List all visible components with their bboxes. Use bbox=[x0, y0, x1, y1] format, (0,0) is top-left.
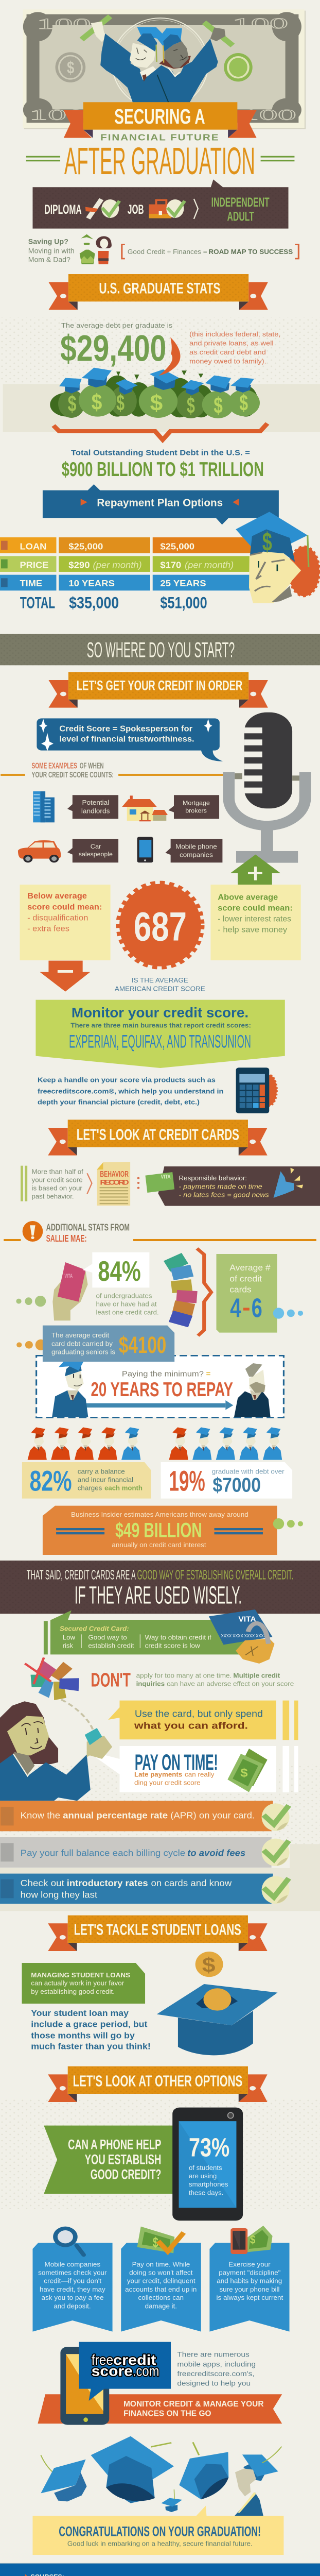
dots decoration right bbox=[273, 1308, 303, 1319]
icon: phone with logo bubble: score bbox=[92, 2364, 133, 2379]
checklist: annual percentage rate: (APR) on your card. bbox=[170, 1810, 255, 1821]
repayment table: LOAN bbox=[20, 542, 46, 552]
tag: landlords bbox=[67, 795, 118, 819]
above average box: - help save money bbox=[218, 925, 288, 934]
panel: 19 percent debt over 7000: $7000 bbox=[212, 1474, 261, 1496]
icon: smartphone 73 percent: these days. bbox=[189, 2189, 223, 2196]
hundred dollar bill: 100 bbox=[232, 15, 288, 32]
section: mobile tips and app bbox=[32, 2226, 290, 2425]
checklist: introductory rates: how long they last bbox=[21, 1890, 98, 1900]
section: title header bbox=[23, 9, 306, 229]
hundred dollar bill: 100 bbox=[37, 16, 91, 32]
panel: responsible behavior: VITA bbox=[161, 1173, 171, 1180]
panel: 49 billion interest bbox=[43, 1506, 277, 1555]
ribbon: monitor credit on the go bbox=[38, 2394, 282, 2424]
checklist: annual percentage rate bbox=[0, 1801, 290, 1831]
road map bracket statement bbox=[122, 245, 298, 259]
raised fist bbox=[235, 2468, 263, 2516]
icon: smartphone 73 percent: 73% bbox=[189, 2132, 229, 2162]
hundred dollar bill: $ bbox=[67, 58, 74, 77]
panel: secured credit card: credit score is low bbox=[145, 1642, 200, 1650]
mobile apps text: freecreditscore.com's, bbox=[177, 2370, 255, 2378]
ribbon: monitor credit on the go: FINANCES ON THE GO bbox=[123, 2409, 211, 2418]
don't apply warning: DON'T bbox=[91, 1669, 131, 1690]
keep a handle text: depth your financial picture (credit, debt, etc.) bbox=[38, 1099, 200, 1106]
graduates row: 19 percent bbox=[169, 1427, 282, 1460]
past behaviour text bbox=[21, 1166, 92, 1201]
section: repayment stats bbox=[16, 1326, 303, 1555]
past behaviour text: More than half of bbox=[31, 1167, 83, 1175]
hundred dollar bill bbox=[23, 9, 306, 129]
below average box: Below average bbox=[27, 891, 87, 901]
grace period note: much faster than you think! bbox=[31, 2041, 151, 2051]
callout: 84 percent: least one credit card. bbox=[96, 1309, 159, 1316]
checklist: pay full balance: to avoid fees bbox=[187, 1848, 245, 1858]
money bags with caps: $ bbox=[116, 391, 125, 416]
checklist: pay full balance bbox=[0, 1837, 290, 1868]
spokesperson speech bubble: level of financial trustworthiness. bbox=[59, 735, 194, 743]
panel: spend what you can afford: Use the card, but only spend bbox=[135, 1708, 263, 1719]
dark band: diploma, job, adult: DIPLOMA bbox=[44, 202, 82, 216]
repayment plan banner bbox=[43, 484, 279, 524]
panel: monitor your credit score: Monitor your credit score. bbox=[72, 1005, 248, 1021]
panel: 19 percent debt over 7000: graduate with debt over bbox=[212, 1467, 285, 1475]
young graduate bbox=[52, 1357, 88, 1417]
tip card: mobile companies: have credit, they may bbox=[40, 2285, 105, 2293]
above average box: Above average bbox=[218, 893, 278, 902]
grace period note bbox=[31, 2008, 151, 2051]
debt note: as credit card debt and bbox=[189, 349, 266, 357]
section: used wisely bbox=[0, 1561, 320, 1911]
below average box bbox=[20, 885, 111, 960]
tip card: mobile companies: ask you to pay a fee bbox=[42, 2294, 104, 2301]
icon: smartphone 73 percent: smartphones bbox=[189, 2180, 228, 2188]
examples label bbox=[1, 761, 223, 779]
panel: can a phone help: CAN A PHONE HELP bbox=[68, 2137, 161, 2153]
repayment table: (per month) bbox=[93, 561, 142, 570]
additional stats label bbox=[4, 1221, 316, 1244]
panel: responsible behavior: - no lates fees = good news bbox=[179, 1191, 269, 1198]
dashed box: twenty years to repay bbox=[37, 1355, 283, 1417]
tip card: pay on time: collections can bbox=[138, 2294, 184, 2301]
mobile apps text: designed to help you bbox=[177, 2380, 251, 2387]
repayment table: $290 bbox=[68, 561, 90, 570]
hundred dollar bill: 100 bbox=[29, 107, 85, 124]
checklist: introductory rates: introductory rates bbox=[67, 1878, 148, 1889]
tag: landlords: landlords bbox=[81, 807, 110, 815]
subtitle: FINANCIAL FUTURE bbox=[100, 133, 218, 143]
saving up question: Moving in with bbox=[28, 247, 75, 255]
total student debt bbox=[62, 449, 264, 481]
examples label: YOUR CREDIT SCORE COUNTS: bbox=[31, 770, 114, 779]
dark band: diploma, job, adult bbox=[32, 179, 289, 229]
repayment table bbox=[0, 537, 253, 612]
checklist: pay full balance: Pay your full balance each billing cycle bbox=[21, 1848, 185, 1858]
section: saving and graduate stats bbox=[0, 234, 320, 440]
panel: pay on time: Late payments bbox=[134, 1770, 182, 1778]
panel: average number of cards: 6 bbox=[252, 1294, 262, 1323]
repayment table: PRICE bbox=[20, 561, 48, 570]
mobile apps text: mobile apps, including bbox=[177, 2360, 256, 2368]
icon: coin dropping into cap bbox=[157, 1952, 278, 2055]
past behaviour text: your credit score bbox=[31, 1176, 83, 1183]
tip card: payment discipline: Exercise your bbox=[228, 2260, 271, 2268]
total student debt: Total Outstanding Student Debt in the U.S. = bbox=[71, 449, 250, 457]
arrow: swoosh to bags bbox=[159, 337, 181, 376]
section band: so where do you start bbox=[0, 634, 320, 665]
repayment plan banner: Repayment Plan Options bbox=[97, 497, 223, 509]
panel: average number of cards: of credit bbox=[229, 1274, 262, 1283]
repayment table: $25,000 bbox=[68, 542, 103, 552]
band: used wisely headline: THAT SAID, CREDIT CARDS ARE A bbox=[27, 1568, 136, 1583]
money bags with caps bbox=[50, 368, 260, 418]
callout: 84 percent: have or have had at bbox=[96, 1300, 157, 1308]
panel: responsible behavior: Responsible behavior: bbox=[179, 1174, 247, 1182]
tag: landlords: Potential bbox=[82, 799, 109, 806]
repayment table: TOTAL bbox=[20, 594, 55, 612]
panel: spend what you can afford bbox=[108, 1701, 298, 1740]
title ribbon: SECURING A bbox=[114, 105, 205, 128]
hundred dollar bill: 100 bbox=[240, 107, 296, 124]
tag: mobile phone companies: companies bbox=[180, 851, 213, 858]
grace period note: those months will go by bbox=[31, 2030, 135, 2040]
footer: sources bbox=[0, 2563, 320, 2576]
worried graduate head: $ bbox=[262, 527, 272, 556]
panel: average number of cards: Average # bbox=[229, 1263, 271, 1273]
repayment table: $35,000 bbox=[69, 594, 119, 612]
panel: secured credit card: Secured Credit Card: bbox=[60, 1625, 129, 1632]
icon: smartphone 73 percent: of students bbox=[189, 2164, 222, 2172]
title ribbon bbox=[64, 102, 257, 138]
past behaviour text: is based on your bbox=[31, 1184, 82, 1192]
panel: pay on time: can really bbox=[185, 1770, 215, 1778]
heading ribbon: credit bbox=[48, 672, 268, 708]
ribbon: monitor credit on the go: MONITOR CREDIT & MANAGE YOUR bbox=[123, 2399, 264, 2409]
money bags with caps: $ bbox=[150, 391, 163, 416]
checklist: introductory rates bbox=[0, 1874, 290, 1904]
additional stats label: SALLIE MAE: bbox=[46, 1233, 87, 1244]
dashed box: twenty years to repay: = bbox=[206, 1370, 210, 1378]
tip card: payment discipline: and habits by making bbox=[217, 2277, 282, 2284]
panel: monitor your credit score: There are three main bureaus that report credit scores: bbox=[70, 1022, 251, 1029]
badge: 687 score bbox=[118, 883, 202, 967]
icon: locked card: XXXX XXXX XXXX XXXX bbox=[221, 1634, 266, 1638]
panel: 82 percent carry a balance: each month bbox=[104, 1484, 143, 1492]
icon: behavior record document bbox=[97, 1162, 139, 1206]
saving up question: Saving Up? bbox=[28, 238, 68, 246]
above average box bbox=[210, 885, 301, 960]
panel: 49 billion interest: $49 BILLION bbox=[115, 1519, 202, 1542]
money bags with caps: $ bbox=[68, 392, 76, 417]
icon: mobile phone bbox=[137, 837, 153, 862]
checklist: introductory rates: on cards and know bbox=[151, 1878, 232, 1889]
tag: mortgage brokers: brokers bbox=[185, 807, 207, 814]
panel: 82 percent carry a balance: charges bbox=[78, 1484, 102, 1492]
panel: congratulations: Good luck in embarking on a healthy, secure financial future. bbox=[67, 2539, 253, 2547]
repayment table: 25 YEARS bbox=[160, 579, 206, 589]
icon: behavior record document: RECORD bbox=[100, 1178, 129, 1187]
woman with card bbox=[0, 1700, 112, 1801]
tag: mortgage brokers bbox=[168, 795, 219, 819]
dots decoration orange bbox=[16, 1340, 46, 1350]
debt note: (this includes federal, state, bbox=[189, 331, 280, 338]
panel: responsible behavior bbox=[145, 1166, 320, 1206]
below average box: - extra fees bbox=[27, 924, 69, 933]
above average box: - lower interest rates bbox=[218, 914, 291, 923]
heading ribbon: student loans bbox=[48, 1916, 268, 1951]
don't apply warning: apply for too many at one time. bbox=[136, 1671, 232, 1679]
money bags with caps: $ bbox=[214, 394, 223, 418]
panel: secured credit card: Good way to bbox=[88, 1634, 127, 1641]
tip card: pay on time: damage it. bbox=[145, 2302, 177, 2310]
panel: pay on time: ding your credit score bbox=[134, 1778, 201, 1786]
grace period note: Your student loan may bbox=[31, 2008, 129, 2018]
keep a handle text: Keep a handle on your score via products such as bbox=[38, 1077, 216, 1084]
panel: congratulations bbox=[32, 2506, 283, 2555]
panel: managing student loans: MANAGING STUDENT LOANS bbox=[31, 1971, 130, 1979]
heading ribbon: other options bbox=[48, 2066, 268, 2102]
worried graduate head bbox=[236, 512, 319, 603]
icon: buildings bbox=[33, 791, 55, 822]
panel: secured credit card: Low bbox=[63, 1634, 75, 1641]
icon: stack of cards bbox=[164, 1253, 198, 1327]
panel: spend what you can afford: what you can afford. bbox=[134, 1720, 248, 1731]
debt note: money owed to family). bbox=[189, 358, 266, 365]
panel: 19 percent debt over 7000 bbox=[161, 1462, 292, 1499]
graduates raising diplomas bbox=[82, 16, 233, 102]
panel: 82 percent carry a balance bbox=[22, 1462, 151, 1499]
money bags with caps: $ bbox=[239, 391, 248, 416]
past behaviour text: past behavior. bbox=[31, 1193, 74, 1200]
don't apply warning: can have an adverse effect on your score bbox=[167, 1680, 294, 1687]
panel: average number of cards bbox=[217, 1254, 277, 1333]
don't apply warning: Multiple credit bbox=[233, 1671, 280, 1679]
debt note bbox=[189, 331, 280, 365]
repayment table: $170 bbox=[160, 561, 181, 570]
icon: phone with logo bubble bbox=[60, 2342, 171, 2425]
icon: parents bbox=[80, 234, 112, 264]
debt note: and private loans, as well bbox=[189, 340, 274, 347]
examples label: OF WHEN bbox=[80, 761, 104, 770]
road map bracket statement: ROAD MAP TO SUCCESS bbox=[208, 248, 293, 256]
icon: phone with logo bubble: free bbox=[92, 2352, 113, 2368]
additional stats label: ADDITIONAL STATS FROM bbox=[46, 1222, 130, 1233]
brace arrow bbox=[54, 423, 268, 440]
tip card: payment discipline: is always kept current bbox=[217, 2294, 283, 2301]
panel: secured credit card: establish credit bbox=[88, 1642, 134, 1650]
dark band: diploma, job, adult: ADULT bbox=[227, 209, 254, 224]
icon: smartphone 73 percent: are using bbox=[189, 2172, 217, 2180]
heading ribbon: credit cards bbox=[48, 1120, 268, 1156]
panel: managing student loans: by establishing good credit. bbox=[31, 1988, 115, 1995]
panel: pay on time: PAY ON TIME! bbox=[135, 1750, 218, 1775]
tip card: mobile companies: credit—if you don't bbox=[44, 2277, 101, 2284]
panel: pay on time bbox=[86, 1746, 298, 1792]
repayment table: $25,000 bbox=[160, 542, 194, 552]
steel panel: average debt: card debt carried by bbox=[51, 1340, 113, 1347]
icon: hand holding card bbox=[52, 1262, 88, 1320]
icon: minus arrow bbox=[40, 961, 90, 992]
steel panel: average debt: The average credit bbox=[51, 1331, 109, 1339]
average debt statistic: $29,400 bbox=[60, 328, 166, 369]
road map bracket statement: Good Credit + Finances = bbox=[128, 248, 207, 256]
saving up question bbox=[28, 238, 75, 264]
tip card: mobile companies bbox=[32, 2227, 113, 2332]
title side rules bbox=[26, 156, 294, 161]
checklist: introductory rates: Check out bbox=[21, 1878, 64, 1889]
section: checklist and student loans bbox=[0, 1801, 290, 2055]
icon: hand holding card: VITA bbox=[64, 1273, 73, 1279]
badge: 687 score: 687 bbox=[134, 904, 187, 950]
repayment table: 10 YEARS bbox=[68, 579, 115, 589]
average debt statistic: The average debt per graduate is bbox=[61, 322, 172, 330]
icon: pile of cards crossed out bbox=[25, 1657, 79, 1700]
average score caption bbox=[115, 976, 205, 992]
heading ribbon: graduate stats: U.S. GRADUATE STATS bbox=[99, 279, 220, 297]
repayment table: $51,000 bbox=[160, 594, 207, 612]
tip card: payment discipline bbox=[209, 2226, 290, 2332]
don't apply warning bbox=[91, 1669, 294, 1690]
section: credit cards bbox=[4, 1120, 320, 1336]
repayment table: (per month) bbox=[185, 561, 234, 570]
panel: can a phone help: YOU ESTABLISH bbox=[85, 2152, 161, 2167]
callout: 84 percent bbox=[83, 1252, 159, 1316]
panel: pay on time: $ bbox=[240, 1767, 248, 1780]
tip card: payment discipline: payment "discipline" bbox=[219, 2269, 281, 2276]
spokesperson speech bubble: Credit Score = Spokesperson for bbox=[59, 724, 193, 733]
heading ribbon: graduate stats bbox=[48, 274, 268, 310]
tip card: pay on time: doing so won't affect bbox=[129, 2269, 193, 2276]
panel: average number of cards: 4 bbox=[230, 1294, 241, 1323]
section: credit in order bbox=[1, 672, 305, 885]
saving up question: Mom & Dad? bbox=[28, 256, 70, 264]
panel: secured credit card: Way to obtain credit if bbox=[145, 1634, 211, 1641]
examples label: SOME EXAMPLES bbox=[31, 761, 77, 770]
panel: 49 billion interest: annually on credit card interest bbox=[112, 1541, 206, 1549]
tag: mobile phone companies bbox=[165, 839, 222, 862]
icon: car bbox=[18, 840, 61, 862]
tip card: mobile companies: Mobile companies bbox=[44, 2260, 100, 2268]
tag: car salespeople: Car bbox=[91, 843, 101, 850]
dark band: diploma, job, adult: JOB bbox=[128, 202, 144, 216]
icon: phone with logo bubble: .com bbox=[133, 2364, 159, 2379]
icon: coin dropping into cap: $ bbox=[202, 1954, 216, 1977]
icon: plus arrow bbox=[230, 855, 280, 885]
panel: secured credit card bbox=[44, 1611, 245, 1654]
money bags with caps: $ bbox=[187, 394, 195, 418]
steel panel: average debt bbox=[43, 1326, 174, 1362]
panel: monitor your credit score bbox=[35, 1000, 285, 1068]
graduates row: 82 percent bbox=[28, 1427, 140, 1460]
panel: managing student loans: can actually work in your favor bbox=[31, 1979, 125, 1987]
flying graduation caps bbox=[41, 2436, 281, 2512]
keep a handle text bbox=[38, 1077, 223, 1106]
steel panel: average debt: graduating seniors is bbox=[51, 1348, 115, 1355]
dark band: diploma, job, adult: INDEPENDENT bbox=[211, 195, 270, 209]
spokesperson speech bubble bbox=[37, 718, 223, 761]
keep a handle text: freecreditscore.com®, which help you understand in bbox=[38, 1088, 223, 1095]
panel: responsible behavior: - payments made on time bbox=[179, 1182, 262, 1190]
icon: microphone bbox=[229, 713, 305, 863]
mobile apps text: There are numerous bbox=[177, 2350, 250, 2359]
dots decoration left bbox=[16, 1296, 46, 1307]
below average box: - disqualification bbox=[27, 913, 88, 922]
section: total debt and repayment bbox=[0, 449, 320, 665]
icon: locked card: VITA bbox=[238, 1615, 256, 1623]
mobile apps text bbox=[177, 2350, 256, 2387]
section: other options bbox=[0, 2008, 320, 2221]
callout: 84 percent: of undergraduates bbox=[96, 1292, 152, 1299]
money bags with caps: $ bbox=[92, 390, 102, 415]
panel: 82 percent carry a balance: 82% bbox=[30, 1465, 72, 1497]
icon: behavior record document: BEHAVIOR bbox=[100, 1169, 129, 1179]
tip card: pay on time: your credit, delinquent bbox=[127, 2277, 195, 2284]
don't apply warning: inquiries bbox=[136, 1680, 165, 1687]
dots decoration green bbox=[273, 1518, 303, 1529]
panel: 82 percent carry a balance: and incur financial bbox=[78, 1476, 133, 1483]
icon: calculator bbox=[236, 1067, 277, 1113]
average debt statistic bbox=[60, 322, 172, 369]
panel: 82 percent carry a balance: carry a balance bbox=[78, 1467, 125, 1475]
tip card: pay on time bbox=[121, 2227, 201, 2332]
checklist: annual percentage rate: annual percentage rate bbox=[63, 1810, 168, 1821]
icon: smartphone 73 percent bbox=[172, 2108, 243, 2221]
above average box: score could mean: bbox=[218, 904, 293, 912]
older graduate bbox=[234, 1363, 271, 1417]
tip card: payment discipline: $ bbox=[250, 2233, 255, 2246]
section: congratulations and sources bbox=[0, 2436, 320, 2576]
grace period note: include a grace period, but bbox=[31, 2019, 147, 2029]
band: used wisely headline bbox=[0, 1561, 320, 1614]
checklist: annual percentage rate: Know the bbox=[21, 1810, 60, 1821]
panel: 19 percent debt over 7000: 19% bbox=[169, 1465, 205, 1497]
tip card: mobile companies: and deposit. bbox=[54, 2302, 91, 2310]
icon: house bbox=[122, 795, 168, 821]
steel panel: average debt: $4100 bbox=[119, 1332, 166, 1358]
brace bbox=[197, 1248, 211, 1336]
panel: average number of cards: cards bbox=[229, 1284, 252, 1294]
tip card: pay on time: Pay on time. While bbox=[132, 2260, 190, 2268]
tip card: payment discipline: sure your phone bill bbox=[219, 2285, 279, 2293]
panel: 49 billion interest: Business Insider estimates Americans throw away around bbox=[71, 1511, 248, 1518]
average score caption: IS THE AVERAGE bbox=[132, 976, 188, 984]
icon: phone with logo bubble: credit bbox=[113, 2352, 156, 2368]
average score caption: AMERICAN CREDIT SCORE bbox=[115, 985, 205, 992]
tip card: pay on time: $ bbox=[153, 2235, 158, 2250]
panel: managing student loans bbox=[22, 1963, 145, 2004]
dashed box: twenty years to repay: Paying the minimum? bbox=[122, 1370, 204, 1378]
tip card: pay on time: accounts that end up in bbox=[125, 2285, 197, 2293]
below average box: score could mean: bbox=[27, 903, 102, 911]
repayment table: TIME bbox=[20, 579, 42, 589]
panel: can a phone help bbox=[44, 2126, 177, 2194]
tag: mortgage brokers: Mortgage bbox=[183, 800, 210, 806]
section: average score and monitoring bbox=[20, 883, 301, 1113]
tag: car salespeople: salespeople bbox=[79, 851, 113, 858]
panel: secured credit card: risk bbox=[63, 1642, 74, 1650]
panel: can a phone help: GOOD CREDIT? bbox=[91, 2167, 161, 2182]
tip card: mobile companies: sometimes check your bbox=[38, 2269, 107, 2276]
icon: locked card bbox=[209, 1609, 275, 1664]
tag: mobile phone companies: Mobile phone bbox=[175, 843, 217, 850]
callout: 84 percent: 84% bbox=[98, 1256, 141, 1287]
tag: car salespeople bbox=[67, 839, 118, 862]
